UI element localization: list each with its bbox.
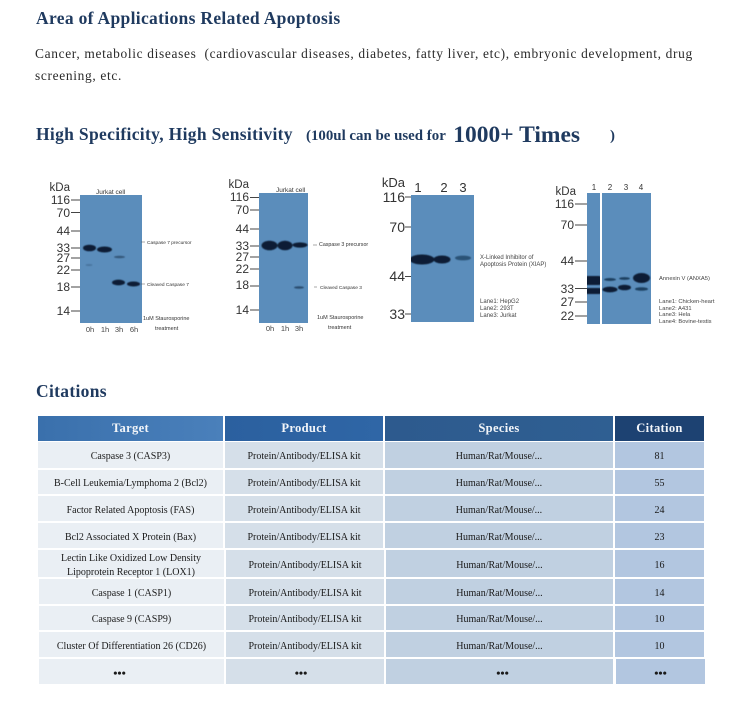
- blot 1: caspase 7: Caspase 7 precursor: [147, 240, 192, 246]
- text block: application areas: [35, 46, 693, 83]
- row: CASP1: Human/Rat/Mouse/...: [456, 588, 543, 598]
- blot 4: annexin V: Lane3: Hela: [659, 312, 691, 318]
- row: more: •••: [295, 666, 307, 680]
- heading: high specificity: High Specificity, High Sensitivity: [36, 124, 293, 144]
- blot 3: XIAP: 33: [389, 306, 405, 322]
- blot 4: annexin V: Lane2: A431: [659, 306, 692, 312]
- blot 2: caspase 3: 116: [230, 190, 249, 204]
- row: FAS: Human/Rat/Mouse/...: [456, 504, 542, 516]
- blot 3: XIAP: 116: [383, 189, 405, 205]
- blot 4: annexin V: 2: [608, 183, 613, 192]
- table header: citation: Citation: [636, 421, 683, 435]
- blot 3: XIAP: X-Linked Inhibitor of: [480, 255, 534, 261]
- blot 1: caspase 7: Cleaved Caspase 7: [147, 282, 189, 288]
- row: Bcl2: Human/Rat/Mouse/...: [456, 478, 542, 489]
- row: CASP1: 14: [654, 588, 664, 598]
- blot 4: annexin V: [555, 183, 715, 325]
- blot 2: caspase 3: 27: [236, 250, 249, 264]
- blot 1: caspase 7: 1uM Staurosporine: [143, 316, 189, 322]
- blot 2: caspase 3: 18: [236, 278, 249, 292]
- blot 1: caspase 7: 22: [57, 263, 70, 277]
- row: Bcl2: B-Cell Leukemia/Lymphoma 2 (Bcl2): [54, 478, 207, 489]
- blot 1: caspase 7: 6h: [130, 325, 138, 334]
- table header: product: Product: [281, 421, 327, 435]
- row: CASP3: 81: [654, 451, 664, 462]
- row: LOX1: Lectin Like Oxidized Low Density: [61, 552, 201, 564]
- row: CD26: 10: [654, 640, 664, 652]
- blot 4: annexin V: 3: [624, 183, 629, 192]
- blot 3: XIAP: [382, 175, 546, 322]
- row: more: •••: [654, 666, 667, 680]
- row: Bax: Human/Rat/Mouse/...: [456, 532, 542, 542]
- blot 3: XIAP: 70: [389, 219, 405, 235]
- blot 1: caspase 7: Jurkat cell: [96, 189, 126, 196]
- blot 4: annexin V: 22: [561, 309, 574, 323]
- blot 4: annexin V: Annexin V (ANXA5): [659, 276, 710, 282]
- row: CD26: Human/Rat/Mouse/...: [456, 640, 543, 652]
- row: CASP3: Protein/Antibody/ELISA kit: [247, 451, 361, 462]
- table header: target: [38, 416, 223, 441]
- blot 2: caspase 3: kDa: [229, 179, 250, 191]
- row: CASP1: Caspase 1 (CASP1): [92, 588, 171, 598]
- table header: product: [225, 416, 383, 441]
- row: Bax: 23: [654, 532, 664, 542]
- blot 1: caspase 7: [50, 182, 192, 334]
- row: CASP3: [38, 442, 704, 468]
- blot 2: caspase 3: 33: [236, 239, 249, 253]
- blot 2: caspase 3: 3h: [295, 324, 303, 333]
- row: more: •••: [113, 666, 126, 680]
- blot 1: caspase 7: treatment: [155, 326, 179, 332]
- blot 4: annexin V: kDa: [556, 186, 577, 198]
- blot 2: caspase 3: Jurkat cell: [276, 187, 306, 194]
- blot 3: XIAP: Lane1: HepG2: [480, 299, 520, 305]
- blot 3: XIAP: Apoptosis Protein (XIAP): [480, 262, 546, 268]
- row: FAS: Factor Related Apoptosis (FAS): [67, 504, 194, 516]
- row: CASP3: Caspase 3 (CASP3): [91, 451, 170, 462]
- row: Bax: Bcl2 Associated X Protein (Bax): [65, 532, 196, 542]
- table header: target: Target: [112, 421, 149, 435]
- blot 2: caspase 3: 22: [236, 262, 249, 276]
- row: CASP3: Human/Rat/Mouse/...: [456, 451, 542, 462]
- blot 4: annexin V: Lane4: Bovine-testis: [659, 319, 712, 325]
- blot 3: XIAP: kDa: [382, 175, 406, 190]
- blot 1: caspase 7: 3h: [115, 325, 123, 334]
- blot 2: caspase 3: treatment: [328, 325, 352, 331]
- row: more: [39, 659, 705, 684]
- blot 3: XIAP: Lane3: Jurkat: [480, 313, 517, 319]
- row: CASP9: 10: [654, 614, 664, 625]
- row: CASP9: Caspase 9 (CASP9): [92, 614, 171, 625]
- table header: citation: [615, 416, 704, 441]
- blot 2: caspase 3: 70: [236, 203, 249, 217]
- blot 2: caspase 3: 0h: [266, 324, 274, 333]
- row: Bcl2: 55: [654, 478, 664, 489]
- row: LOX1: 16: [654, 560, 664, 570]
- row: LOX1: [38, 550, 704, 578]
- blot 1: caspase 7: kDa: [50, 182, 71, 194]
- row: LOX1: Human/Rat/Mouse/...: [456, 560, 543, 570]
- blot 4: annexin V: 70: [561, 218, 574, 232]
- text block: application areas: Cancer, metabolic diseases (cardiovascular diseases, diabetes, fatty liver, etc), embryonic development, drug: [35, 46, 693, 61]
- blot 4: annexin V: 4: [639, 183, 644, 192]
- blot 4: annexin V: 27: [561, 295, 574, 309]
- heading: area of applications: Area of Applications Related Apoptosis: [36, 8, 340, 28]
- row: CASP9: Human/Rat/Mouse/...: [456, 614, 543, 625]
- row: LOX1: Lipoprotein Receptor 1 (LOX1): [67, 566, 195, 578]
- row: FAS: [38, 496, 704, 521]
- row: CASP1: Protein/Antibody/ELISA kit: [248, 588, 362, 598]
- blot 1: caspase 7: 18: [57, 280, 70, 294]
- blot 4: annexin V: 116: [555, 197, 574, 211]
- text block: application areas: screening, etc.: [35, 68, 122, 83]
- blot 1: caspase 7: 1h: [101, 325, 109, 334]
- row: CASP9: Protein/Antibody/ELISA kit: [248, 614, 362, 625]
- blot 1: caspase 7: 116: [51, 193, 70, 207]
- blot 3: XIAP: 44: [389, 268, 405, 284]
- blot 4: annexin V: 33: [561, 282, 574, 296]
- blot 2: caspase 3: Caspase 3 precursor: [319, 242, 368, 248]
- blot 4: annexin V: 1: [592, 183, 597, 192]
- row: CD26: Cluster Of Differentiation 26 (CD26): [57, 640, 206, 652]
- row: Bax: [38, 523, 704, 548]
- row: Bcl2: [38, 470, 704, 494]
- row: FAS: Protein/Antibody/ELISA kit: [247, 504, 361, 516]
- row: CASP9: [39, 606, 704, 630]
- blot 1: caspase 7: 0h: [86, 325, 94, 334]
- table header: species: Species: [478, 421, 520, 435]
- blot 3: XIAP: Lane2: 293T: [480, 306, 514, 312]
- heading note: usage times: (100ul can be used for 1000+ Times ): [306, 122, 615, 148]
- blot 2: caspase 3: 1uM Staurosporine: [317, 315, 363, 321]
- row: more: •••: [496, 666, 509, 680]
- blot 3: XIAP: 3: [459, 180, 467, 195]
- blot 4: annexin V: Lane1: Chicken-heart: [659, 299, 715, 305]
- row: CD26: Protein/Antibody/ELISA kit: [248, 640, 362, 652]
- blot 1: caspase 7: 44: [57, 224, 70, 238]
- blot 2: caspase 3: Cleaved Caspase 3: [320, 285, 362, 291]
- blot 2: caspase 3: [229, 179, 368, 333]
- blot 2: caspase 3: 44: [236, 222, 249, 236]
- blot 2: caspase 3: 1h: [281, 324, 289, 333]
- row: FAS: 24: [654, 504, 664, 516]
- row: CASP1: [39, 579, 704, 604]
- row: Bcl2: Protein/Antibody/ELISA kit: [247, 478, 361, 489]
- table: citations: [38, 416, 705, 684]
- western blot figures: [50, 175, 715, 334]
- blot 4: annexin V: 44: [561, 254, 574, 268]
- table header: species: [385, 416, 613, 441]
- row: LOX1: Protein/Antibody/ELISA kit: [248, 560, 362, 570]
- heading: citations: Citations: [36, 381, 107, 401]
- row: Bax: Protein/Antibody/ELISA kit: [247, 532, 361, 542]
- blot 1: caspase 7: 70: [57, 206, 70, 220]
- blot 3: XIAP: 2: [440, 180, 448, 195]
- blot 2: caspase 3: 14: [236, 303, 249, 317]
- blot 3: XIAP: 1: [414, 180, 422, 195]
- row: CD26: [39, 632, 704, 657]
- blot 1: caspase 7: 27: [57, 251, 70, 265]
- blot 1: caspase 7: 14: [57, 304, 70, 318]
- blot 1: caspase 7: 33: [57, 241, 70, 255]
